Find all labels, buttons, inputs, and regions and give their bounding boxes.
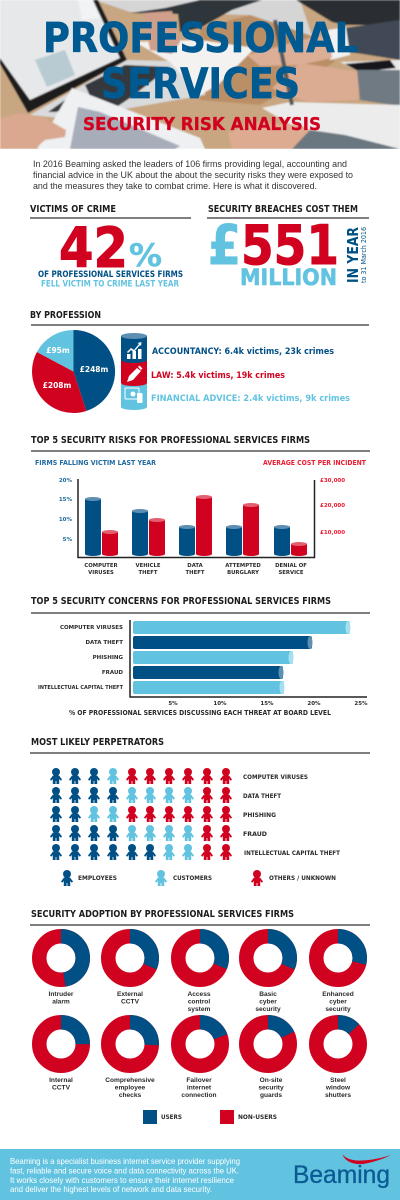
footer text: and deliver the highest levels of network and data security. (10, 1185, 212, 1194)
footer text: fast, reliable and secure voice and data connectivity across the UK. (10, 1166, 239, 1176)
donut: enhanced cyber security: Enhanced (322, 991, 354, 998)
legend: perpetrators: EMPLOYEES (78, 875, 117, 882)
bar chart: security concerns: FRAUD (102, 670, 123, 676)
intro text: In 2016 Beaming asked the leaders of 106 firms providing legal, accounting and (33, 158, 347, 169)
heading: top 5 risks: TOP 5 SECURITY RISKS FOR PROFESSIONAL SERVICES FIRMS (31, 435, 310, 446)
donut: external CCTV: External (117, 991, 143, 998)
title: SECURITY RISK ANALYSIS (83, 115, 321, 135)
donut: on-site security guards: On-site (260, 1077, 283, 1084)
donut: internal CCTV (39, 1022, 83, 1092)
intro text: and the measures they take to combat crime. Here is what it discovered. (33, 180, 317, 191)
donut: access control system: control (188, 998, 210, 1006)
donut: steel window shutters: Steel (330, 1077, 346, 1084)
pie chart: cost by profession (32, 330, 115, 413)
legend: perpetrators (61, 870, 336, 886)
pie chart: cost by profession: £95m (46, 346, 70, 355)
panel: cost of breaches: SECURITY BREACHES COST THEM (208, 204, 358, 215)
bar chart: security risks: 5% (63, 537, 72, 543)
panel: victims of crime: % (129, 238, 162, 274)
donut: intruder alarm: alarm (52, 998, 70, 1006)
donut: steel window shutters: window (325, 1084, 351, 1092)
donut: comprehensive employee checks: employee (115, 1084, 146, 1092)
donut: steel window shutters: shutters (325, 1092, 351, 1099)
bar chart: security concerns: % OF PROFESSIONAL SERVICES DISCUSSING EACH THREAT AT BOARD LEVEL (69, 709, 331, 717)
pictogram: perpetrators (50, 768, 341, 860)
bar chart: security risks: £30,000 (320, 478, 345, 484)
panel: victims of crime: FELL VICTIM TO CRIME LAST YEAR (41, 278, 179, 288)
bar chart: security risks: £10,000 (320, 530, 345, 536)
intro text (33, 158, 353, 191)
donut: on-site security guards: security (258, 1084, 284, 1092)
profession stats: LAW: 5.4k victims, 19k crimes (151, 371, 285, 381)
logo: Beaming: Beaming (293, 1161, 390, 1189)
bar chart: security concerns: 25% (354, 701, 368, 707)
panel: cost of breaches (207, 204, 369, 291)
pictogram: perpetrators: DATA THEFT (243, 793, 282, 800)
header photo (0, 0, 400, 149)
bar chart: security concerns: PHISHING (93, 655, 123, 661)
donut: access control system: system (188, 1006, 210, 1013)
panel: cost of breaches: to 31 March 2016 (360, 227, 368, 283)
donut: basic cyber security: security (255, 1006, 281, 1013)
legend: users and non-users: NON-USERS (238, 1114, 277, 1121)
bar chart: security concerns: 10% (213, 701, 227, 707)
bar chart: security concerns: INTELLECTUAL CAPITAL THEFT (38, 685, 123, 691)
donut: comprehensive employee checks: Comprehensive (105, 1077, 155, 1084)
panel: cost of breaches: IN YEAR (344, 227, 362, 283)
heading: security adoption: SECURITY ADOPTION BY PROFESSIONAL SERVICES FIRMS (31, 909, 294, 920)
panel: cost of breaches: 551 (241, 214, 339, 277)
donut: enhanced cyber security: security (325, 1006, 351, 1013)
pie chart: cost by profession: £248m (80, 365, 109, 374)
donut: internal CCTV: CCTV (52, 1084, 71, 1092)
panel: cost of breaches: £ (208, 214, 241, 277)
bar chart: security concerns: 5% (168, 701, 178, 707)
donut: access control system: Access (187, 991, 211, 998)
panel: victims of crime: OF PROFESSIONAL SERVICES FIRMS (38, 269, 183, 279)
bar chart: security concerns: COMPUTER VIRUSES (60, 625, 123, 631)
bar chart: security risks: 15% (59, 497, 72, 503)
donut: comprehensive employee checks (105, 1022, 155, 1099)
pictogram: perpetrators: FRAUD (243, 831, 267, 838)
title: PROFESSIONAL (43, 14, 358, 62)
donut: failover internet connection: connection (181, 1092, 217, 1099)
bar chart: security risks: ATTEMPTED (225, 563, 261, 569)
pictogram: perpetrators: PHISHING (243, 812, 276, 819)
legend: users and non-users: USERS (161, 1114, 182, 1121)
bar chart: security risks: THEFT (139, 570, 158, 576)
panel: victims of crime: VICTIMS OF CRIME (30, 204, 116, 215)
icon stack: professions (121, 333, 147, 410)
donut: failover internet connection: internet (187, 1084, 212, 1092)
bar chart: security risks: 10% (59, 517, 72, 523)
bar chart: security risks: SERVICE (278, 570, 304, 576)
footer band (0, 1149, 400, 1200)
panel: victims of crime: 42 (59, 216, 128, 280)
bar chart: security risks: AVERAGE COST PER INCIDENT (263, 459, 366, 467)
bar chart: security concerns: 15% (260, 701, 274, 707)
pictogram: perpetrators: COMPUTER VIRUSES (243, 774, 308, 781)
bar chart: security risks: 20% (59, 478, 72, 484)
donut: internal CCTV: Internal (49, 1077, 73, 1084)
donut: enhanced cyber security: cyber (329, 998, 347, 1006)
bar chart: security risks: DENIAL OF (275, 563, 307, 569)
bar chart: security risks: COMPUTER (84, 563, 118, 569)
heading: most likely perpetrators: MOST LIKELY PERPETRATORS (31, 737, 164, 748)
title: SERVICES (101, 59, 300, 108)
donut: access control system (178, 936, 222, 1013)
pie chart: cost by profession: £208m (43, 381, 72, 390)
pictogram: perpetrators: INTELLECTUAL CAPITAL THEFT (244, 850, 341, 857)
donut: on-site security guards: guards (260, 1092, 282, 1099)
donut: on-site security guards (246, 1022, 290, 1099)
donut charts: security adoption (39, 936, 360, 1099)
donut: external CCTV (108, 936, 152, 1006)
footer text: It works closely with customers to ensure their internet resilience (10, 1176, 234, 1185)
bar chart: security risks: VIRUSES (88, 570, 114, 576)
bar chart: security risks: THEFT (186, 570, 205, 576)
bar chart: security concerns: DATA THEFT (85, 640, 123, 646)
donut: failover internet connection (178, 1022, 222, 1099)
donut: basic cyber security: Basic (259, 991, 277, 998)
donut: intruder alarm (39, 936, 83, 1006)
donut: external CCTV: CCTV (121, 998, 140, 1006)
bar chart: security concerns (38, 620, 368, 717)
heading: top 5 concerns: TOP 5 SECURITY CONCERNS FOR PROFESSIONAL SERVICES FIRMS (31, 596, 331, 607)
intro text: financial advice in the UK about the about the security risks they were exposed to (33, 169, 353, 180)
bar chart: security risks (35, 459, 366, 576)
donut: failover internet connection: Failover (186, 1077, 212, 1084)
donut: intruder alarm: Intruder (49, 991, 74, 998)
bar chart: security risks: £20,000 (320, 503, 345, 509)
footer text: Beaming is a specialist business internet service provider supplying (10, 1157, 240, 1166)
heading: by profession: BY PROFESSION (30, 310, 101, 321)
bar chart: security risks: FIRMS FALLING VICTIM LAST YEAR (35, 459, 157, 467)
footer text (10, 1157, 240, 1194)
bar chart: security risks: VEHICLE (135, 563, 161, 569)
donut: basic cyber security: cyber (259, 998, 277, 1006)
legend: perpetrators: OTHERS / UNKNOWN (269, 875, 336, 882)
donut: basic cyber security (246, 936, 290, 1013)
legend: users and non-users (143, 1110, 277, 1124)
bar chart: security risks: BURGLARY (227, 570, 259, 576)
legend: perpetrators: CUSTOMERS (173, 875, 212, 882)
donut: comprehensive employee checks: checks (119, 1092, 142, 1099)
profession stats: FINANCIAL ADVICE: 2.4k victims, 9k crimes (151, 394, 350, 404)
profession stats: ACCOUNTANCY: 6.4k victims, 23k crimes (152, 347, 334, 357)
panel: cost of breaches: MILLION (240, 266, 337, 291)
title (43, 14, 358, 135)
profession stats (151, 347, 350, 404)
donut: enhanced cyber security (316, 936, 360, 1013)
donut: steel window shutters (316, 1022, 360, 1099)
bar chart: security risks: DATA (187, 563, 204, 569)
panel: victims of crime (30, 204, 191, 288)
bar chart: security concerns: 20% (307, 701, 321, 707)
